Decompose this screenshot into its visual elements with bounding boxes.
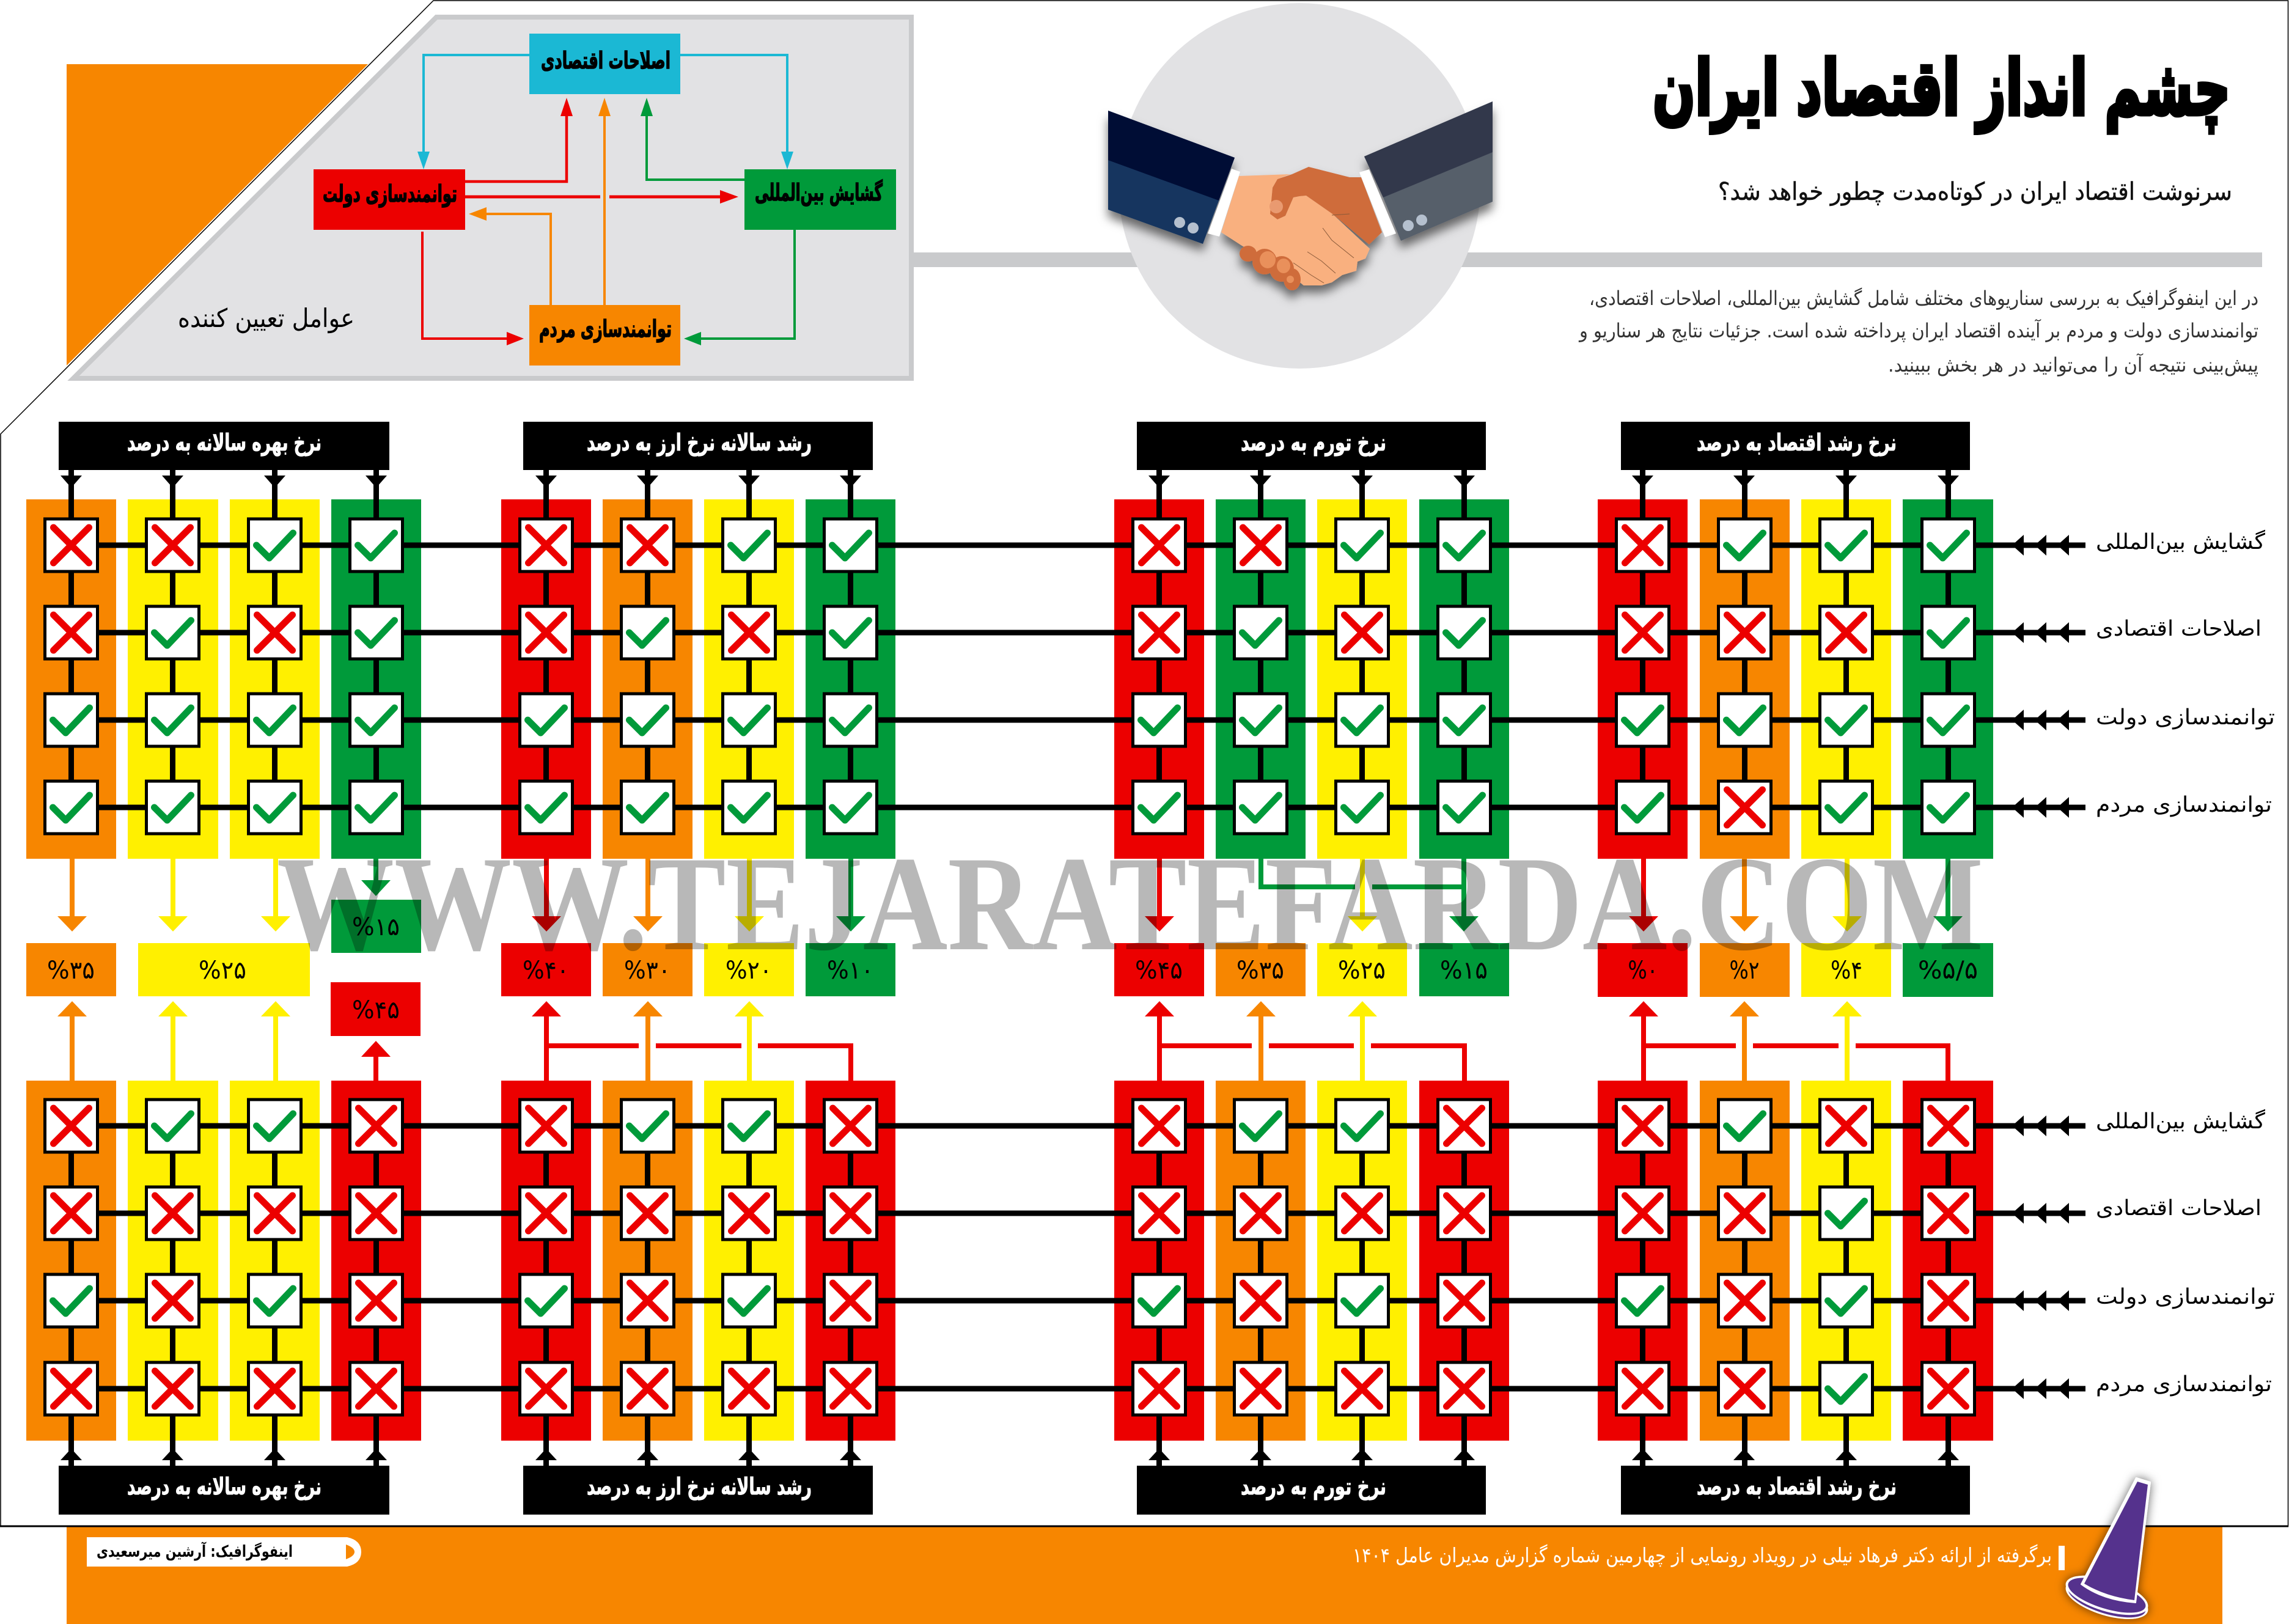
- row connector lines with arrowheads: [72, 535, 2085, 1399]
- row labels lower: اصلاحات اقتصادی: [2096, 1196, 2261, 1221]
- arrows up to results: [57, 1001, 1948, 1081]
- panel caption: عوامل تعیین کننده: [178, 303, 355, 333]
- results: inflation: %۱۵: [1440, 957, 1488, 985]
- results: economic growth: %۵/۵: [1918, 957, 1978, 985]
- results: currency growth: %۲۰: [726, 957, 772, 985]
- source note: برگرفته از ارائه دکتر فرهاد نیلی در رویداد رونمایی از چهارمین شماره گزارش مدیران عامل ۱۴۰۴: [1353, 1543, 2052, 1567]
- subtitle: سرنوشت اقتصاد ایران در کوتاه‌مدت چطور خواهد شد؟: [1718, 178, 2232, 206]
- intro text: [1578, 287, 2258, 377]
- header: currency growth upper: رشد سالانه نرخ ارز به درصد: [587, 429, 812, 456]
- box: economic reforms: [529, 34, 680, 94]
- header: interest rate upper: [59, 422, 389, 470]
- lower column backgrounds: [26, 1081, 1993, 1441]
- header: inflation lower: [1137, 1466, 1486, 1515]
- results: economic growth: %۰: [1628, 957, 1658, 985]
- results: interest rate: [26, 900, 421, 1036]
- watermark: WWW.TEJARATEFARDA.COM: [277, 829, 1983, 979]
- header: currency growth lower: رشد سالانه نرخ ارز به درصد: [587, 1473, 812, 1500]
- header: growth lower: نرخ رشد اقتصاد به درصد: [1697, 1473, 1897, 1500]
- header: growth lower: [1621, 1466, 1970, 1515]
- header: interest rate lower: نرخ بهره سالانه به درصد: [127, 1473, 321, 1500]
- results: economic growth: %۴: [1831, 957, 1862, 985]
- matrix: interest rate, upper scenarios: [45, 470, 402, 834]
- shirt cuffs: [1208, 169, 1240, 237]
- author credit pill: اینفوگرافیک: آرشین میرسعیدی: [97, 1541, 293, 1561]
- results: economic growth: %۲: [1730, 957, 1759, 985]
- arrows down to results: [57, 859, 1963, 931]
- header: inflation upper: نرخ تورم به درصد: [1241, 429, 1386, 457]
- finger highlights and creases: [1260, 200, 1354, 283]
- left sleeve: [1108, 111, 1235, 244]
- matrix: interest rate, lower scenarios: [45, 1100, 402, 1466]
- header: interest rate upper: نرخ بهره سالانه به درصد: [127, 429, 321, 456]
- row labels upper: توانمندسازی دولت: [2096, 705, 2275, 730]
- box: international openness: [744, 169, 896, 230]
- arrows between factors: [417, 55, 795, 345]
- box: people empowerment: [529, 305, 680, 366]
- header arrowheads lower: [61, 1449, 1959, 1460]
- intro text: پیش‌بینی نتیجه آن را می‌توانید در هر بخش ببینید.: [1888, 353, 2258, 377]
- matrix: currency growth, lower scenarios: [520, 1100, 876, 1466]
- icon: purple cone: [2061, 1478, 2153, 1624]
- matrix: currency growth, upper scenarios: [520, 470, 876, 834]
- icon: handshake: [1108, 101, 1493, 290]
- results: inflation: [1114, 943, 1509, 996]
- matrix: inflation, lower scenarios: [1133, 1100, 1490, 1466]
- results: currency growth: %۳۰: [624, 957, 671, 985]
- header: inflation upper: [1137, 422, 1486, 470]
- box: government empowerment: [314, 169, 465, 230]
- row labels lower: توانمندسازی دولت: [2096, 1285, 2275, 1309]
- box: people empowerment: توانمندسازی مردم: [539, 315, 672, 343]
- row labels upper: گشایش بین‌المللی: [2096, 529, 2265, 554]
- author credit pill: [87, 1537, 361, 1567]
- header: growth upper: [1621, 422, 1970, 470]
- matrix: economic growth, lower scenarios: [1616, 1100, 1974, 1466]
- header: interest rate lower: [59, 1466, 389, 1515]
- matrix: inflation, upper scenarios: [1133, 470, 1490, 834]
- clasped hands: [1221, 167, 1382, 290]
- row labels lower: توانمندسازی مردم: [2096, 1372, 2272, 1397]
- panel: determining factors: [73, 17, 911, 378]
- box: government empowerment: توانمندسازی دولت: [323, 180, 457, 208]
- header: currency growth upper: [523, 422, 873, 470]
- results: currency growth: %۴۰: [523, 957, 569, 985]
- row labels lower: [2096, 1109, 2275, 1397]
- header arrowheads upper: [61, 476, 1959, 488]
- box: economic reforms: اصلاحات اقتصادی: [541, 47, 671, 74]
- results: interest rate: %۲۵: [199, 957, 246, 985]
- orange corner triangle: [67, 64, 368, 366]
- box: international openness: گشایش بین‌المللی: [755, 179, 883, 206]
- row labels upper: [2096, 529, 2275, 817]
- footer band: [67, 1526, 2222, 1624]
- results: interest rate: %۴۵: [352, 996, 400, 1024]
- row labels upper: اصلاحات اقتصادی: [2096, 617, 2261, 641]
- matrix: economic growth, upper scenarios: [1616, 470, 1974, 834]
- header: growth upper: نرخ رشد اقتصاد به درصد: [1697, 429, 1897, 456]
- header divider bar: [914, 252, 2262, 267]
- upper column backgrounds: [26, 499, 1993, 859]
- row labels lower: گشایش بین‌المللی: [2096, 1109, 2265, 1134]
- circle behind handshake: [1119, 3, 1480, 369]
- results: interest rate: %۱۵: [352, 913, 400, 941]
- row labels upper: توانمندسازی مردم: [2096, 793, 2272, 817]
- results: currency growth: [501, 943, 895, 996]
- results: interest rate: %۳۵: [47, 957, 95, 985]
- results: inflation: %۳۵: [1236, 957, 1284, 985]
- right sleeve: [1364, 101, 1493, 241]
- header: currency growth lower: [523, 1466, 873, 1515]
- results: currency growth: %۱۰: [827, 957, 873, 985]
- results: inflation: %۴۵: [1135, 957, 1183, 985]
- header: inflation lower: نرخ تورم به درصد: [1241, 1473, 1386, 1501]
- results: economic growth: [1598, 943, 1993, 997]
- results: inflation: %۲۵: [1338, 957, 1386, 985]
